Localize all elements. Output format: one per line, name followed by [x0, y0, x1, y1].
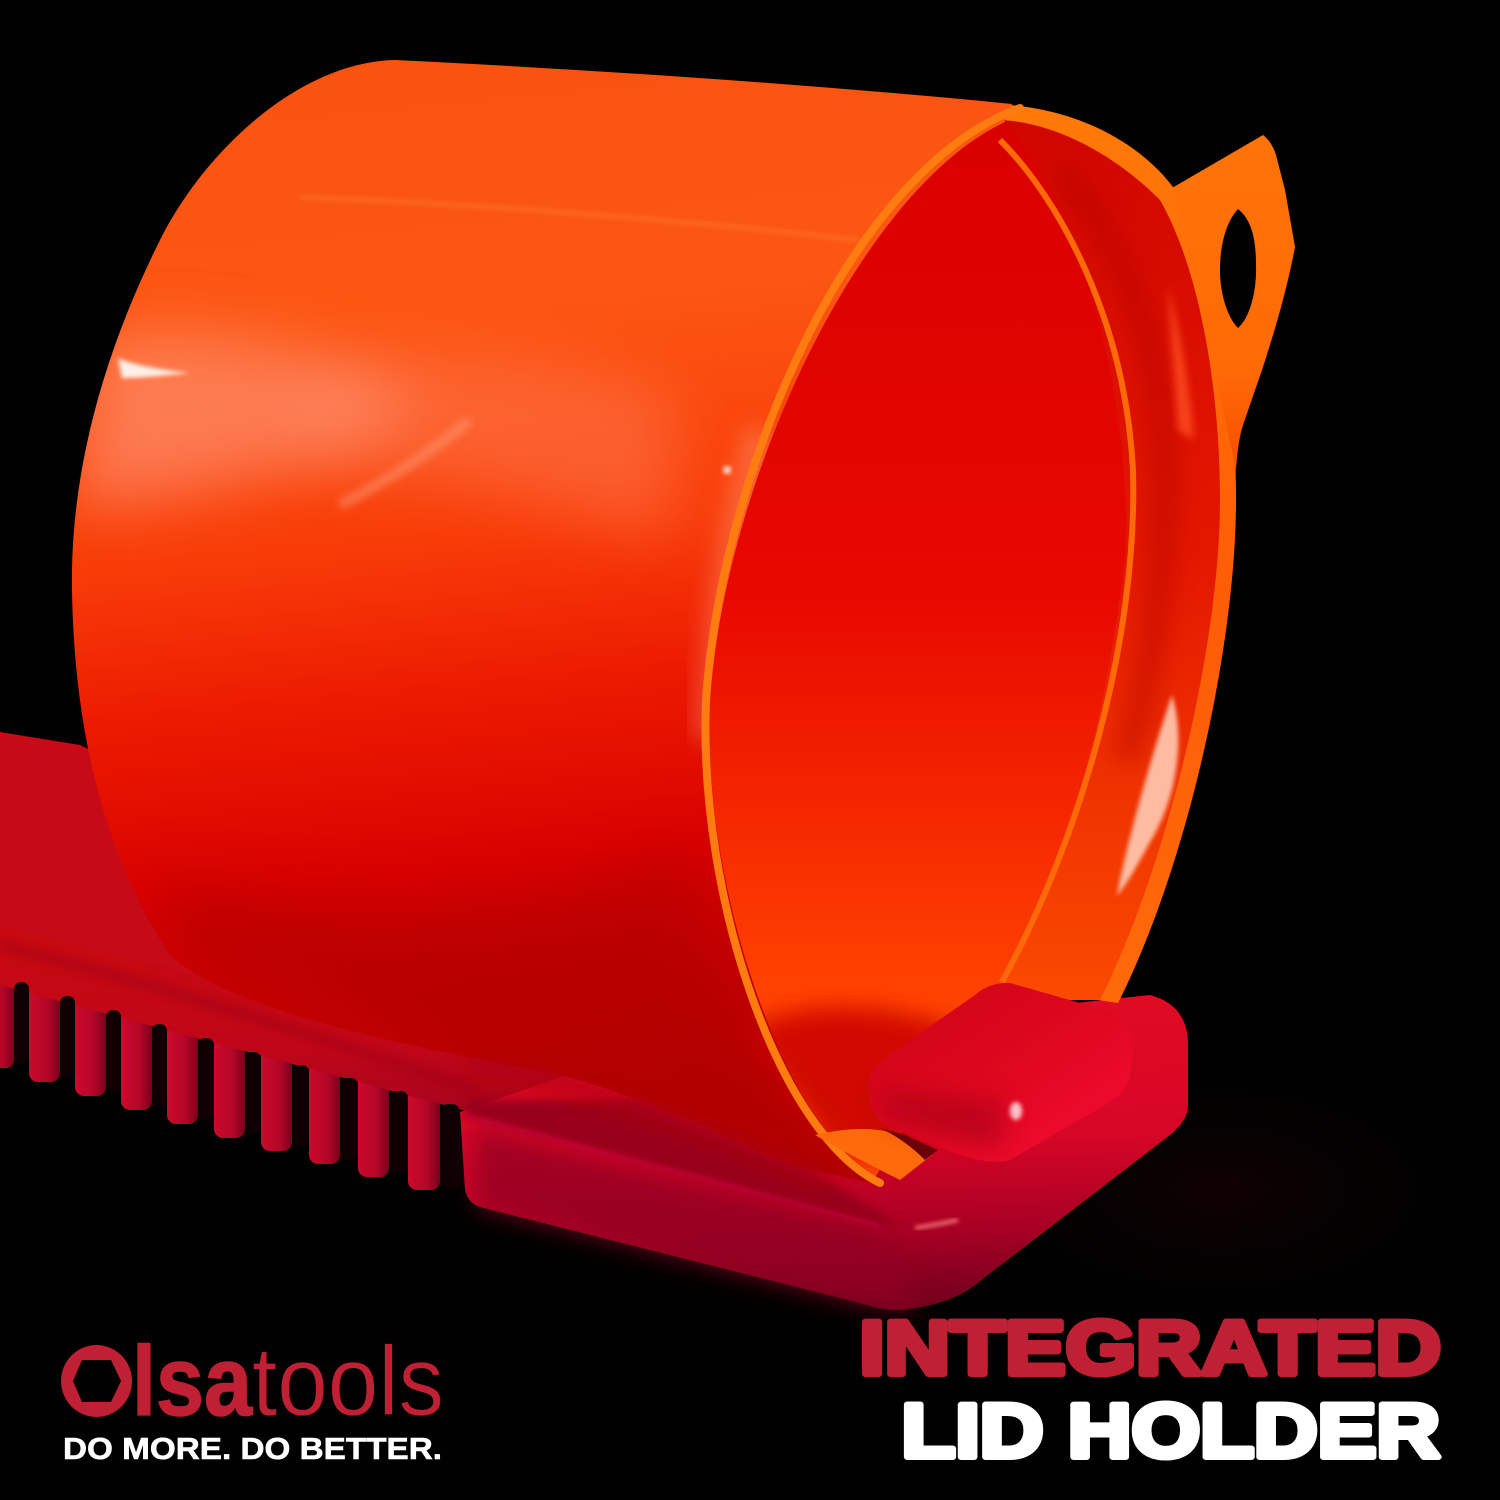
left haze patch: [70, 334, 420, 510]
tagline: DO MORE. DO BETTER.: [63, 1431, 442, 1466]
logo wordmark bold: lsa: [132, 1326, 253, 1436]
lid tab: [1172, 135, 1295, 470]
bar base: [460, 995, 1188, 1310]
inner thread ring: [1000, 140, 1133, 982]
inner face: [709, 122, 1126, 1178]
flange outer rim: [1000, 105, 1236, 1003]
rim edge: [705, 108, 1020, 1183]
middle haze patch: [300, 356, 680, 540]
dark cloth surface glow: [980, 1070, 1460, 1310]
wall glare upper: [1168, 285, 1194, 440]
inner face bottom shadow: [745, 1008, 960, 1165]
orange lid cup: [70, 60, 1295, 1185]
lid holder bar: [0, 732, 1188, 1310]
clip block: [868, 983, 1133, 1162]
headline line 2: LID HOLDER: [902, 1389, 1440, 1474]
scratch streak: [340, 420, 470, 505]
clip shadow side: [875, 1090, 1005, 1150]
comb slots: [14, 982, 460, 1189]
body surface marks, clipped to body: [70, 197, 860, 1150]
logo wordmark light: tools: [252, 1326, 444, 1436]
clip crevice: [880, 1128, 938, 1160]
headline: [860, 1306, 1441, 1474]
wall glare lower: [1117, 695, 1178, 896]
headline line 1: INTEGRATED: [860, 1306, 1441, 1391]
cup bottom edge soft contact shadow: [470, 1062, 830, 1180]
bar top surface: [0, 732, 660, 1110]
bar front face shading: [472, 1125, 920, 1310]
cup foot in clip: [815, 1129, 932, 1180]
comb spine: [0, 925, 660, 1130]
body bottom shading: [158, 854, 744, 1084]
brand logo: [61, 1326, 444, 1466]
clip glint: [1010, 1102, 1022, 1120]
bar front edge highlight: [463, 1115, 880, 1226]
wall shaded band: [1060, 170, 1165, 760]
logo mark: hexagon O: [61, 1345, 132, 1417]
cup outer body: [72, 60, 1012, 1185]
rim halo: [708, 430, 760, 740]
bar upper shadow band: [465, 1100, 900, 1225]
upper faint seam: [300, 197, 860, 240]
inner wall: [900, 120, 1220, 1000]
small glint: [723, 466, 731, 474]
lid holder clip: [868, 983, 1133, 1162]
corner glint: [118, 358, 190, 378]
comb teeth: [0, 960, 440, 1190]
